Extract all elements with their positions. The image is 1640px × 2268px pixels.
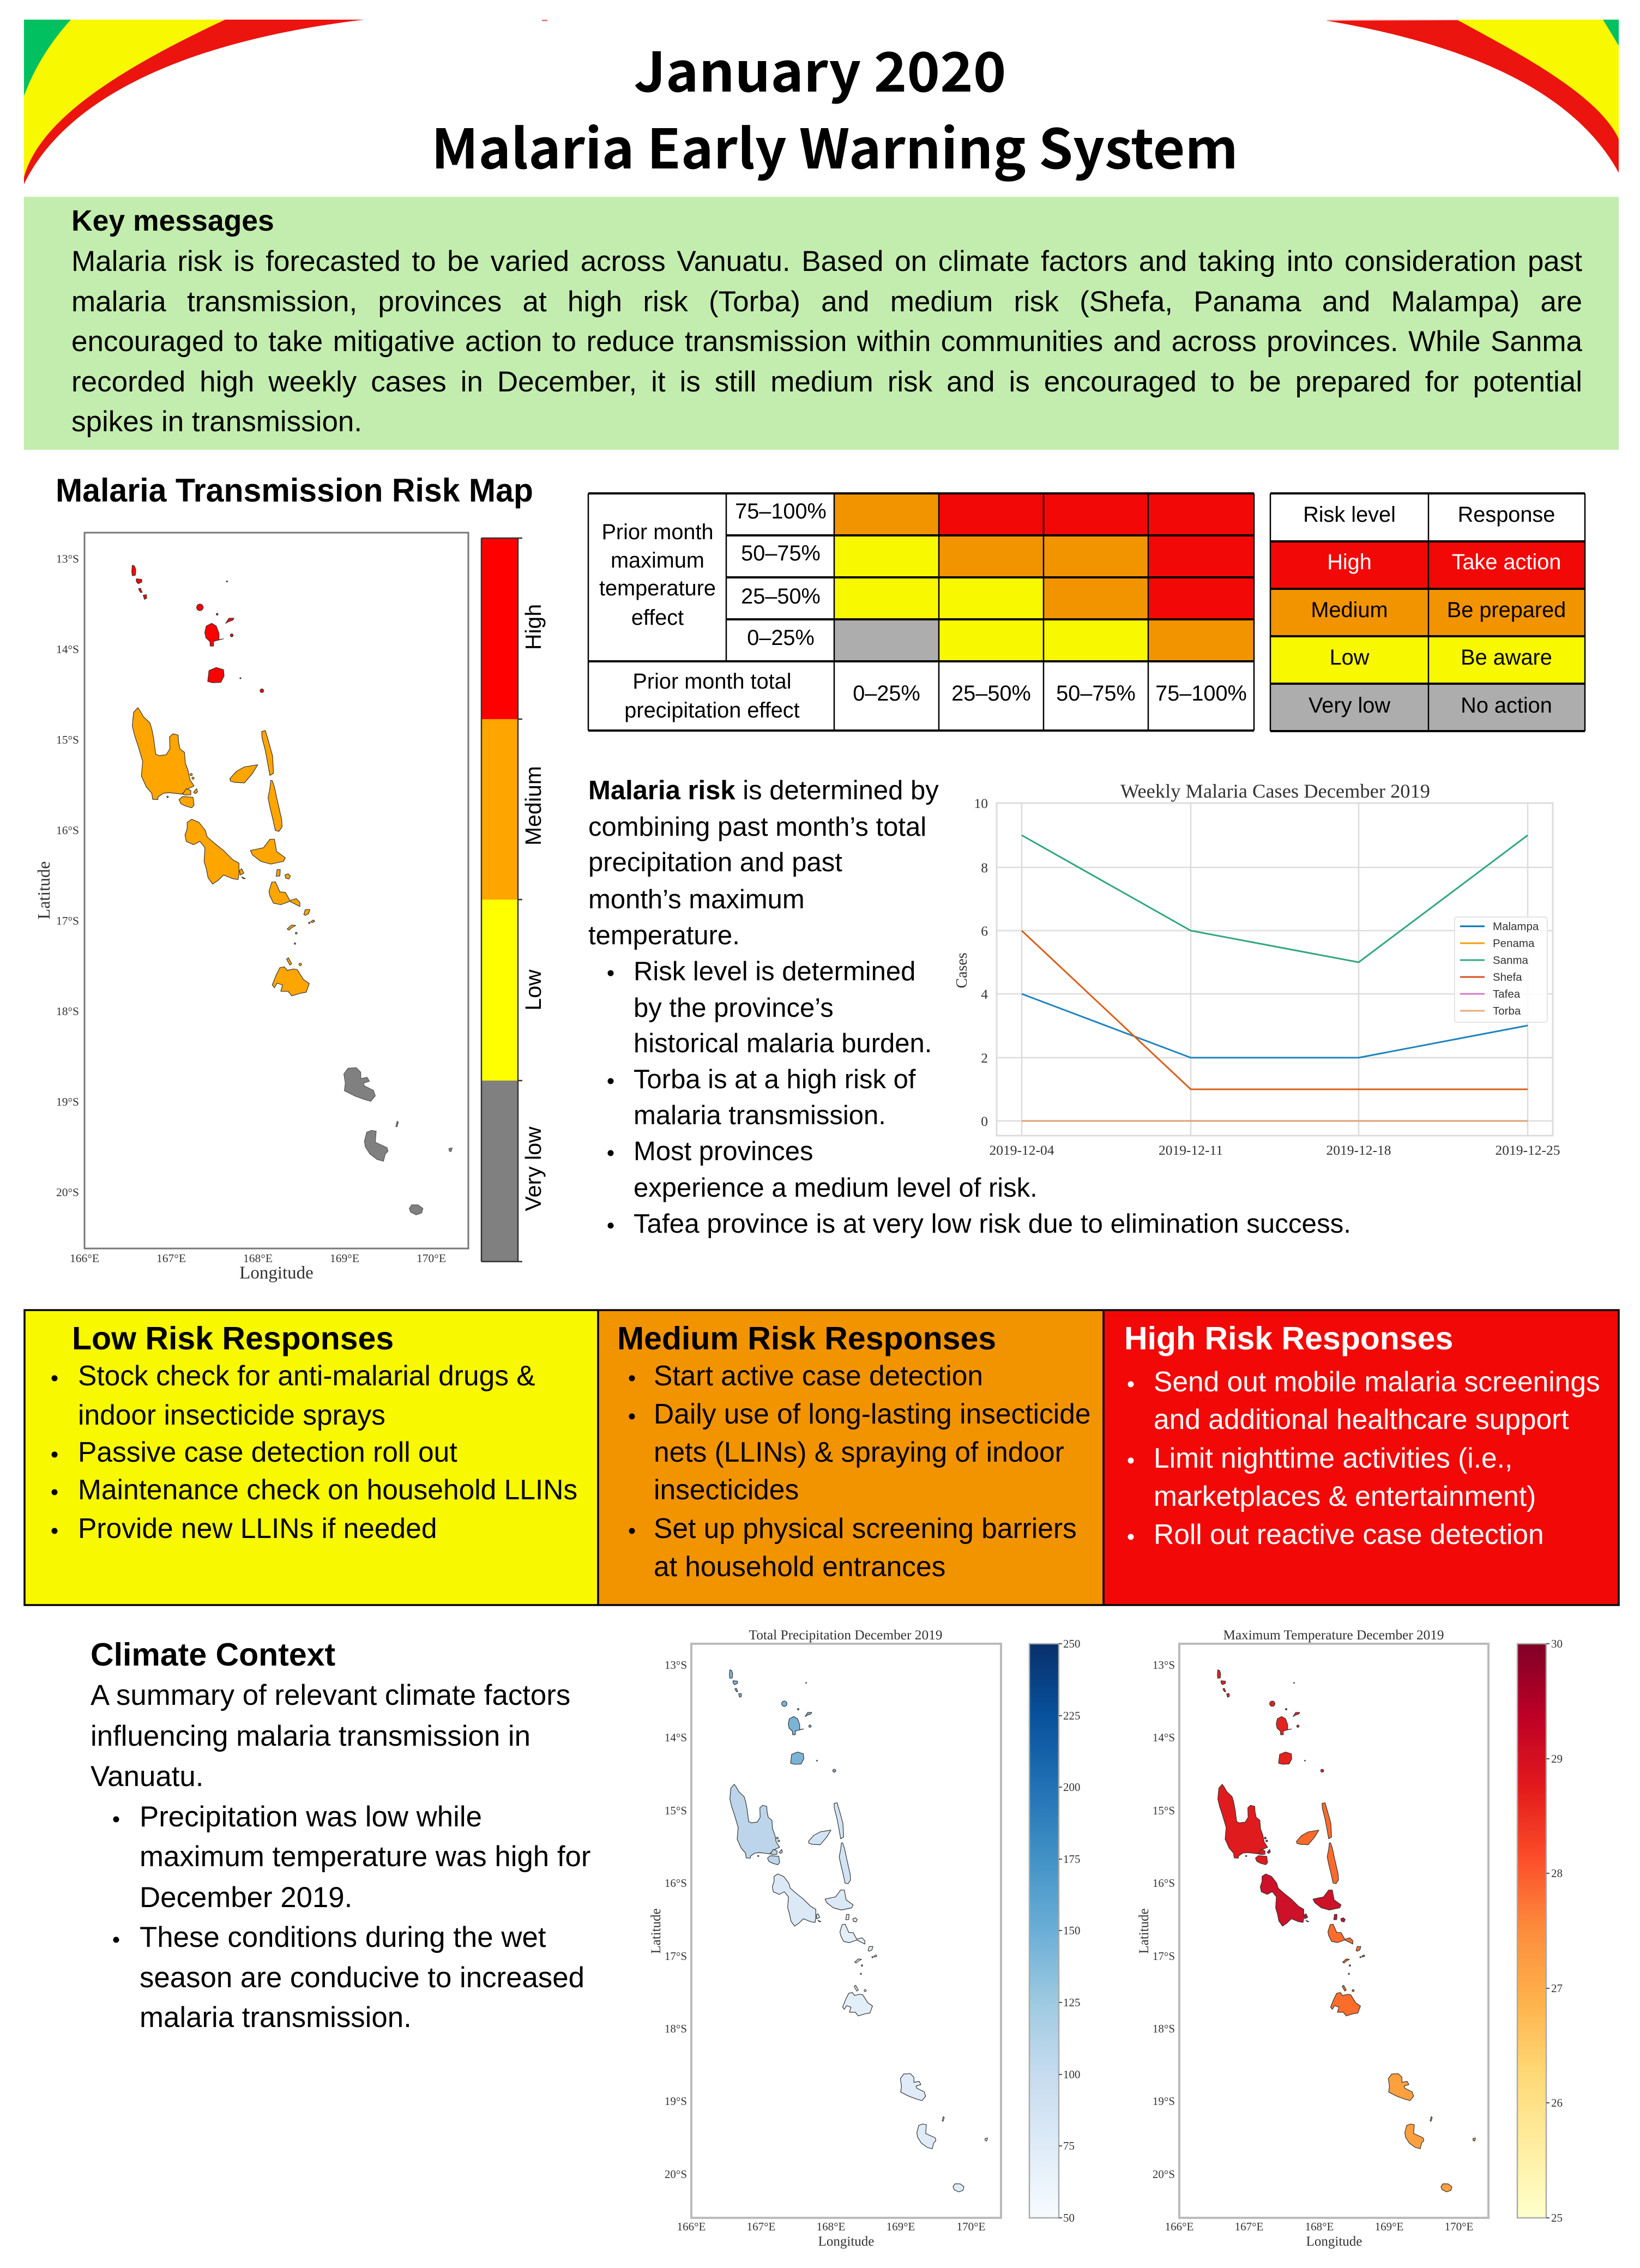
line chart: weekly malaria cases: 2019-12-11 xyxy=(1159,1142,1223,1158)
line chart: weekly malaria cases: Cases xyxy=(954,952,970,988)
title xyxy=(431,28,1238,184)
map: total precipitation December 2019: 20°S xyxy=(665,2168,687,2181)
map: total precipitation December 2019: 168°E xyxy=(817,2220,845,2233)
map: total precipitation December 2019: 166°E xyxy=(677,2220,706,2233)
risk colour bar: Very low xyxy=(521,1126,546,1211)
table: risk matrix: 25–50% xyxy=(741,584,821,608)
line chart: weekly malaria cases: 2019-12-25 xyxy=(1496,1142,1560,1158)
table: risk level and response: Response xyxy=(1458,503,1555,527)
text block: how malaria risk is determined: by the province’s xyxy=(634,993,834,1023)
map: total precipitation December 2019: 15°S xyxy=(665,1804,687,1817)
map: malaria transmission risk: 168°E xyxy=(243,1252,273,1265)
panel: medium risk responses: Daily use of long-lasting insecticide xyxy=(654,1398,1091,1429)
colour bar: temperature: 29 xyxy=(1551,1752,1563,1765)
colour bar: precipitation: 225 xyxy=(1063,1709,1081,1722)
table: risk matrix: Prior month xyxy=(601,520,714,544)
text block: how malaria risk is determined: Most provinces xyxy=(634,1137,813,1166)
table: risk matrix: maximum xyxy=(611,548,704,572)
map: maximum temperature December 2019: 15°S xyxy=(1153,1804,1175,1817)
map: total precipitation December 2019: 14°S xyxy=(665,1731,687,1744)
panel: key messages: Key messages xyxy=(71,205,274,237)
title: Malaria Early Warning System xyxy=(431,105,1238,184)
map: total precipitation December 2019: Longitude xyxy=(818,2234,874,2249)
line chart: weekly malaria cases: 8 xyxy=(981,860,988,876)
map: total precipitation December 2019: 170°E xyxy=(957,2220,985,2233)
title: January 2020 xyxy=(634,28,1006,107)
text block: how malaria risk is determined: malaria transmission. xyxy=(634,1101,886,1130)
table: risk level and response: No action xyxy=(1461,693,1552,717)
map: maximum temperature December 2019: 169°E xyxy=(1375,2220,1403,2233)
map: maximum temperature December 2019: 167°E xyxy=(1235,2220,1263,2233)
panel: low risk responses: Provide new LLINs if needed xyxy=(78,1512,437,1544)
chart legend: Penama xyxy=(1493,937,1535,950)
line chart: weekly malaria cases: 6 xyxy=(981,923,988,939)
map: malaria transmission risk: 15°S xyxy=(56,733,79,746)
text block: climate context: Precipitation was low while xyxy=(140,1801,482,1833)
panel: key messages xyxy=(24,197,1619,450)
text block: climate context: influencing malaria transmission in xyxy=(91,1720,530,1752)
map: malaria transmission risk: 20°S xyxy=(56,1186,79,1199)
panel: key messages: spikes in transmission. xyxy=(71,406,362,438)
text block: climate context: malaria transmission. xyxy=(140,2001,412,2034)
panel: key messages: malaria transmission, provinces at high risk (Torba) and medium risk (Shefa, Panama and Malampa) are xyxy=(71,286,1582,317)
panel: low risk responses: Low Risk Responses xyxy=(72,1320,394,1356)
table: risk level and response: Risk level xyxy=(1303,503,1396,527)
text block: climate context: maximum temperature was high for xyxy=(140,1841,590,1873)
map: total precipitation December 2019: 169°E xyxy=(887,2220,915,2233)
text block: how malaria risk is determined: temperature. xyxy=(588,921,740,950)
table: risk matrix: 25–50% xyxy=(951,681,1031,705)
map: total precipitation December 2019: Latitude xyxy=(649,1908,664,1954)
table: risk matrix: 0–25% xyxy=(853,681,920,705)
map: malaria transmission risk: 170°E xyxy=(417,1252,446,1265)
map: maximum temperature December 2019: 166°E xyxy=(1165,2220,1193,2233)
colour bar: temperature xyxy=(1517,1637,1563,2224)
panel: key messages: encouraged to take mitigative action to reduce transmission within communities and across provinces. While Sanma xyxy=(71,325,1582,358)
map: malaria transmission risk: 14°S xyxy=(56,643,79,656)
text block: climate context: A summary of relevant climate factors xyxy=(91,1679,570,1711)
line chart: weekly malaria cases: 2 xyxy=(981,1050,988,1066)
chart legend xyxy=(1455,917,1547,1022)
colour bar: precipitation xyxy=(1029,1637,1081,2224)
map: malaria transmission risk: Longitude xyxy=(239,1263,313,1283)
text block: climate context: Climate Context xyxy=(91,1637,335,1673)
text block: climate context: season are conducive to increased xyxy=(140,1962,584,1994)
map: malaria transmission risk: 19°S xyxy=(56,1095,79,1108)
colour bar: temperature: 28 xyxy=(1551,1867,1563,1880)
panel: low risk responses: Maintenance check on household LLINs xyxy=(78,1474,577,1505)
colour bar: temperature: 26 xyxy=(1551,2096,1563,2109)
colour bar: temperature: 27 xyxy=(1551,1982,1563,1995)
panel: high risk responses xyxy=(1104,1310,1619,1605)
line chart: weekly malaria cases: 4 xyxy=(981,986,988,1002)
risk colour bar: Low xyxy=(521,969,546,1011)
map: maximum temperature December 2019: 170°E xyxy=(1445,2220,1473,2233)
table: risk matrix: effect xyxy=(631,606,684,630)
header decoration: right corner arcs xyxy=(1327,20,1619,173)
map: maximum temperature December 2019: 13°S xyxy=(1153,1658,1175,1672)
line chart: weekly malaria cases: 2019-12-04 xyxy=(990,1142,1054,1158)
text block: how malaria risk is determined: Torba is at a high risk of xyxy=(634,1065,916,1094)
text block: how malaria risk is determined: precipitation and past xyxy=(588,848,842,877)
text block: climate context: Vanuatu. xyxy=(91,1760,203,1793)
panel: key messages: Malaria risk is forecasted to be varied across Vanuatu. Based on climate factors and taking into consideration past xyxy=(71,245,1582,278)
panel: high risk responses: Roll out reactive case detection xyxy=(1154,1518,1544,1550)
map: maximum temperature December 2019 xyxy=(1137,1628,1488,2249)
chart legend: Shefa xyxy=(1493,971,1522,984)
panel: key messages: recorded high weekly cases in December, it is still medium risk and is encouraged to be prepared for potential xyxy=(71,365,1582,398)
map: malaria transmission risk: 16°S xyxy=(56,824,79,837)
table: risk matrix: 0–25% xyxy=(747,626,815,650)
table: risk matrix: 50–75% xyxy=(741,541,821,565)
map: maximum temperature December 2019: 16°S xyxy=(1153,1877,1175,1890)
panel: high risk responses: marketplaces & entertainment) xyxy=(1154,1480,1536,1512)
map: maximum temperature December 2019: 168°E xyxy=(1305,2220,1334,2233)
colour bar: precipitation: 175 xyxy=(1063,1853,1081,1866)
chart legend: Tafea xyxy=(1493,988,1521,1000)
map: malaria transmission risk: Latitude xyxy=(34,861,53,919)
map: malaria transmission risk: 18°S xyxy=(56,1005,79,1018)
line chart: weekly malaria cases xyxy=(954,780,1560,1158)
table: risk matrix: 75–100% xyxy=(1155,681,1247,705)
risk colour bar xyxy=(481,538,546,1262)
table: risk level and response: Very low xyxy=(1309,693,1390,717)
table: risk matrix: 75–100% xyxy=(735,499,827,523)
panel: low risk responses xyxy=(25,1310,598,1605)
table: risk level and response: High xyxy=(1327,550,1372,574)
map: total precipitation December 2019: 17°S xyxy=(665,1950,687,1963)
colour bar: precipitation: 200 xyxy=(1063,1781,1081,1794)
text block: how malaria risk is determined: Tafea province is at very low risk due to elimination success. xyxy=(634,1209,1351,1239)
map: malaria transmission risk: 166°E xyxy=(70,1252,99,1265)
map: maximum temperature December 2019: 17°S xyxy=(1153,1950,1175,1963)
table: risk level and response: Medium xyxy=(1311,598,1388,622)
colour bar: precipitation: 50 xyxy=(1063,2211,1075,2224)
table: risk level and response: Low xyxy=(1330,646,1370,669)
map: total precipitation December 2019: 18°S xyxy=(665,2022,687,2035)
map: maximum temperature December 2019: 14°S xyxy=(1153,1731,1175,1744)
map: total precipitation December 2019: 167°E xyxy=(747,2220,775,2233)
chart legend: Sanma xyxy=(1493,954,1529,967)
table: risk matrix: 50–75% xyxy=(1056,681,1136,705)
map: total precipitation December 2019: 13°S xyxy=(665,1658,687,1672)
table: risk matrix: Prior month total xyxy=(632,669,792,693)
table: risk level and response xyxy=(1270,493,1585,731)
map: total precipitation December 2019: 16°S xyxy=(665,1877,687,1890)
colour bar: precipitation: 125 xyxy=(1063,1996,1081,2009)
text block: how malaria risk is determined: historical malaria burden. xyxy=(634,1029,932,1058)
panel: medium risk responses: at household entrances xyxy=(654,1551,945,1582)
response panels outline xyxy=(25,1310,1619,1605)
line chart: weekly malaria cases: Weekly Malaria Cases December 2019 xyxy=(1120,780,1430,802)
map: maximum temperature December 2019: 19°S xyxy=(1153,2095,1175,2108)
colour bar: temperature: 25 xyxy=(1551,2211,1563,2224)
risk colour bar: High xyxy=(521,604,546,650)
panel: medium risk responses: nets (LLINs) & spraying of indoor xyxy=(654,1436,1064,1468)
line chart: weekly malaria cases: 2019-12-18 xyxy=(1327,1142,1391,1158)
panel: high risk responses: Send out mobile malaria screenings xyxy=(1154,1366,1600,1397)
map: malaria transmission risk xyxy=(34,533,468,1283)
panel: low risk responses: indoor insecticide sprays xyxy=(78,1399,385,1431)
colour bar: precipitation: 150 xyxy=(1063,1924,1081,1937)
map: malaria transmission risk: 17°S xyxy=(56,914,79,927)
panel: high risk responses: Limit nighttime activities (i.e., xyxy=(1154,1442,1512,1474)
text block: how malaria risk is determined: experience a medium level of risk. xyxy=(634,1173,1038,1203)
panel: low risk responses: Passive case detection roll out xyxy=(78,1436,457,1468)
line chart: weekly malaria cases: 0 xyxy=(981,1113,988,1129)
text block: how malaria risk is determined: Risk level is determined xyxy=(634,957,915,986)
text block: how malaria risk is determined: combining past month’s total xyxy=(588,812,926,842)
colour bar: precipitation: 100 xyxy=(1063,2068,1081,2081)
map: malaria transmission risk: 169°E xyxy=(330,1252,359,1265)
map: malaria transmission risk: 167°E xyxy=(156,1252,186,1265)
chart legend: Malampa xyxy=(1493,920,1539,933)
colour bar: precipitation: 250 xyxy=(1063,1637,1081,1650)
map: maximum temperature December 2019: Maximum Temperature December 2019 xyxy=(1223,1628,1444,1643)
colour bar: temperature: 30 xyxy=(1551,1637,1563,1650)
table: risk matrix: temperature xyxy=(599,576,716,600)
map: maximum temperature December 2019: 18°S xyxy=(1153,2022,1175,2035)
heading: risk map: Malaria Transmission Risk Map xyxy=(56,472,533,509)
map: maximum temperature December 2019: 20°S xyxy=(1153,2168,1175,2181)
header decoration: left corner arcs xyxy=(24,20,547,184)
map: total precipitation December 2019: 19°S xyxy=(665,2095,687,2108)
text block: how malaria risk is determined xyxy=(588,776,1351,1239)
chart legend: Torba xyxy=(1493,1005,1521,1017)
panel: high risk responses: and additional healthcare support xyxy=(1154,1403,1569,1435)
table: risk level and response: Be prepared xyxy=(1447,598,1566,622)
panel: medium risk responses: Set up physical screening barriers xyxy=(654,1512,1077,1544)
text block: how malaria risk is determined: month’s maximum xyxy=(588,885,805,914)
map: maximum temperature December 2019: Latitude xyxy=(1137,1908,1151,1954)
text block: how malaria risk is determined: Malaria risk is determined by xyxy=(588,776,939,805)
table: risk level and response: Take action xyxy=(1452,550,1561,574)
panel: medium risk responses: insecticides xyxy=(654,1474,799,1505)
colour bar: precipitation: 75 xyxy=(1063,2139,1075,2152)
panel: medium risk responses xyxy=(598,1310,1104,1605)
map: total precipitation December 2019 xyxy=(649,1628,1001,2249)
panel: high risk responses: High Risk Responses xyxy=(1124,1320,1453,1356)
panel: low risk responses: Stock check for anti-malarial drugs & xyxy=(78,1360,535,1391)
panel: medium risk responses: Medium Risk Responses xyxy=(617,1320,996,1356)
map: total precipitation December 2019: Total Precipitation December 2019 xyxy=(749,1628,942,1643)
line chart: weekly malaria cases: 10 xyxy=(974,795,988,811)
panel: medium risk responses: Start active case detection xyxy=(654,1360,983,1391)
text block: climate context xyxy=(91,1637,590,2034)
risk colour bar: Medium xyxy=(521,766,546,846)
text block: climate context: These conditions during the wet xyxy=(140,1921,546,1953)
table: risk matrix: precipitation effect xyxy=(624,698,800,722)
text block: climate context: December 2019. xyxy=(140,1881,352,1914)
table: risk level and response: Be aware xyxy=(1461,646,1552,669)
table: risk matrix xyxy=(588,493,1254,731)
map: malaria transmission risk: 13°S xyxy=(56,552,79,565)
map: maximum temperature December 2019: Longitude xyxy=(1306,2234,1362,2249)
